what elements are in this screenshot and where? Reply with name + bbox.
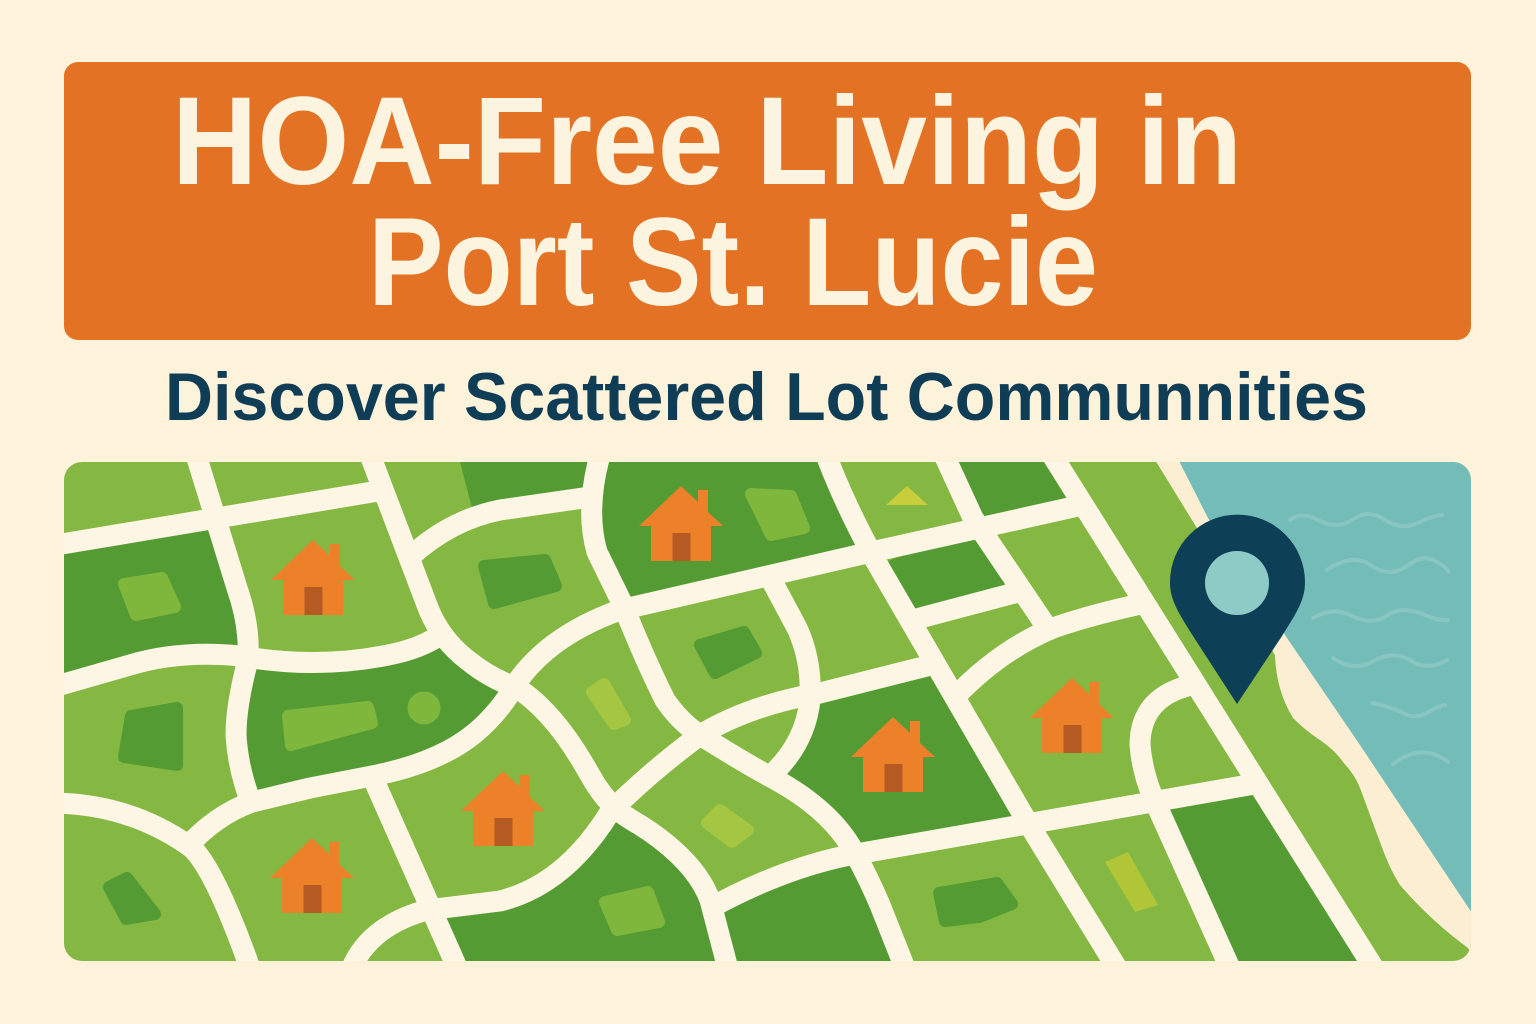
inner lot patches: dark — [109, 560, 1012, 921]
road network — [50, 455, 1375, 970]
house 2 — [461, 771, 545, 846]
dark green blocks — [64, 462, 1372, 965]
park circle — [408, 692, 440, 724]
map panel — [50, 455, 1480, 970]
inner lot patches: light — [124, 494, 804, 930]
house 6 — [1030, 678, 1114, 753]
title line 2: Port St. Lucie — [368, 193, 1098, 332]
land base — [64, 462, 1471, 961]
beach — [1152, 455, 1480, 970]
yellow triangle marker — [886, 486, 928, 505]
water — [1176, 455, 1480, 925]
house 3 — [270, 838, 354, 913]
location pin — [1170, 515, 1305, 704]
yellow lot — [1105, 852, 1158, 912]
house 5 — [851, 717, 935, 792]
title banner — [64, 62, 1471, 340]
subtitle: Discover Scattered Lot Communnities — [165, 359, 1368, 435]
waves — [1290, 514, 1449, 764]
house 1 — [271, 540, 355, 615]
inner lot patches: yellow green — [592, 684, 748, 842]
house 4 — [639, 486, 723, 561]
title line 1: HOA-Free Living in — [172, 72, 1242, 211]
pin center — [1205, 551, 1269, 615]
